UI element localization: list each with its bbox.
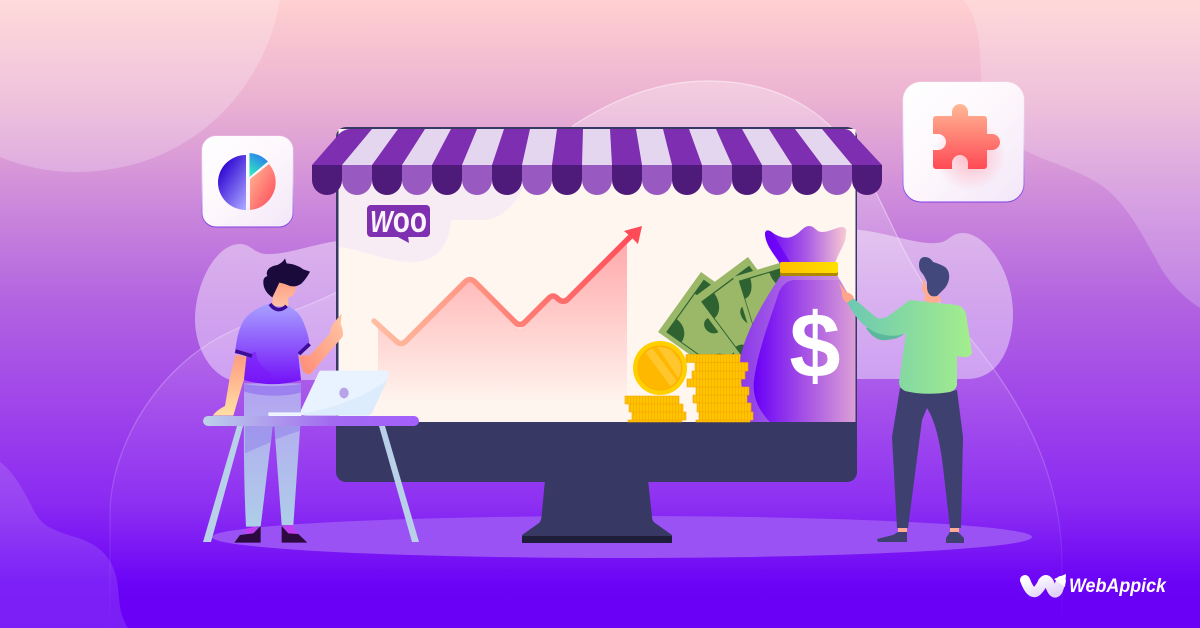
bag: neck <box>765 226 846 264</box>
chart: trend line <box>374 235 632 344</box>
monitor stand <box>522 480 672 543</box>
person 2: arm shadow <box>866 320 906 340</box>
person 2: shoes <box>877 532 964 543</box>
person 1: shoes <box>234 525 307 543</box>
monitor screen <box>338 129 856 422</box>
person: man pointing at screen <box>839 257 972 543</box>
person 2: ankles <box>898 528 959 533</box>
background shape: bottom left blob <box>0 462 128 628</box>
awning: scallops <box>312 165 882 195</box>
woo logo: Woo <box>370 199 427 240</box>
person 1: right arm <box>299 313 343 374</box>
big coin <box>633 341 687 395</box>
background shape: right blob <box>850 229 1013 379</box>
floor ellipse <box>212 516 1032 558</box>
person 1: shirt trim <box>235 304 310 356</box>
person 2: hair <box>919 257 949 296</box>
person 2: hand <box>839 283 854 303</box>
chart: area <box>378 244 627 422</box>
chart: arrow head <box>624 226 642 244</box>
money bills <box>643 241 820 394</box>
person 1: hair <box>263 258 310 297</box>
bag: neck fold <box>765 231 790 262</box>
pie: teal slice <box>250 153 268 177</box>
bag: gold band <box>780 262 838 276</box>
table: top <box>203 416 419 426</box>
table: legs <box>203 426 419 542</box>
background shape: left blob <box>195 240 345 380</box>
laptop <box>268 371 389 416</box>
person: presenter with laptop <box>213 258 343 543</box>
bag: dollar sign: $ <box>789 295 841 397</box>
person 2: neck <box>922 278 942 303</box>
table <box>203 416 419 542</box>
awning: stripes <box>312 129 882 165</box>
card: pie chart icon <box>202 136 293 227</box>
background shape: top right blob <box>963 0 1200 308</box>
awning <box>312 129 882 195</box>
logo: icon <box>1025 574 1066 593</box>
money bag <box>740 226 856 422</box>
person 1: pants <box>244 383 301 527</box>
person 1: left arm <box>213 355 252 416</box>
pie: blue half <box>218 155 246 210</box>
person 1: shirt <box>235 303 309 384</box>
line chart <box>374 226 642 422</box>
card: puzzle icon <box>903 82 1024 202</box>
person 2: pants <box>892 388 963 528</box>
background shape: top left circle <box>0 0 280 172</box>
person 1: neck and face <box>272 282 296 309</box>
pie: red slice <box>250 164 276 210</box>
logo: wordmark: WebAppick <box>1069 576 1167 597</box>
person 1: shirt folds <box>244 352 273 378</box>
coin stack: right <box>686 354 753 422</box>
background shape: large hill <box>110 81 1062 628</box>
bag: inner shade <box>754 280 856 422</box>
bag: body <box>740 275 856 422</box>
coin stack: left <box>625 396 686 422</box>
webappick logo <box>1025 574 1167 597</box>
person 2: sweater <box>847 298 972 394</box>
monitor body <box>336 127 857 482</box>
